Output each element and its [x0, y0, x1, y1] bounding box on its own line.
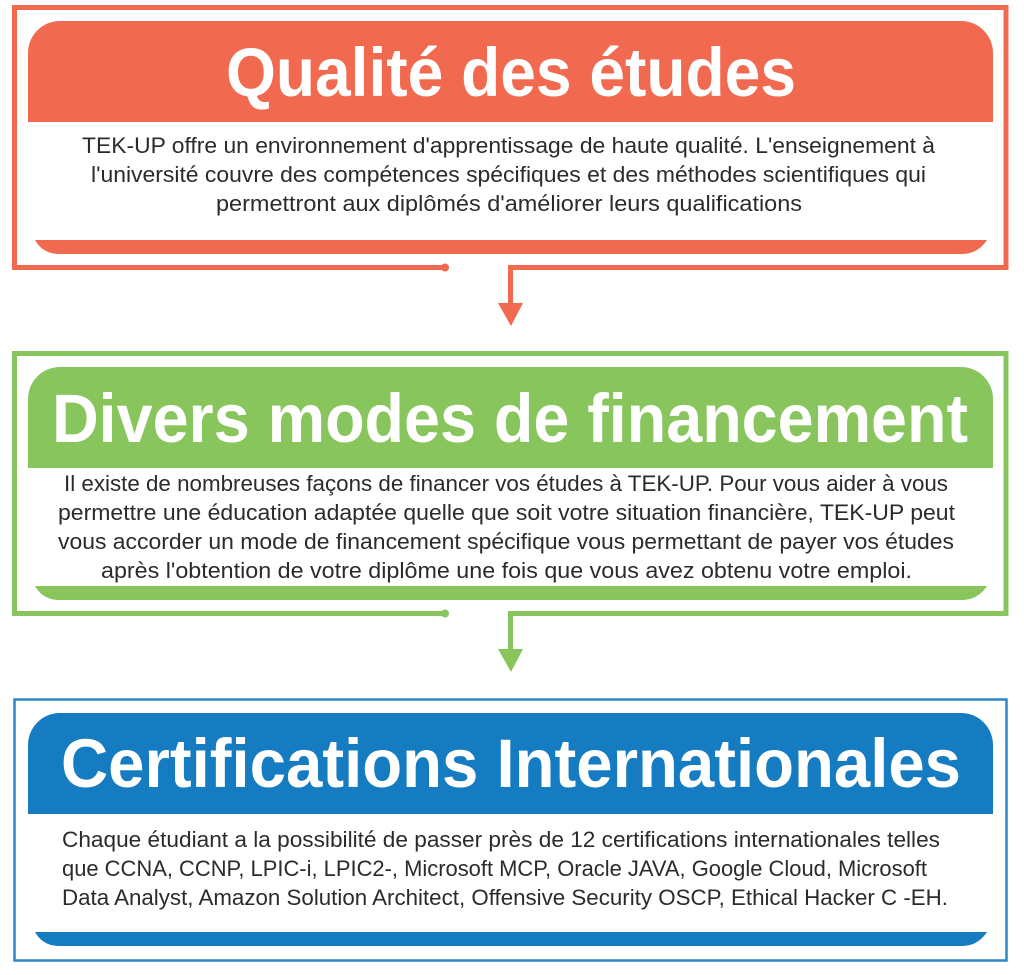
panel border: blue — [14, 700, 1006, 960]
panel: Qualité des études — [14, 8, 1006, 326]
header band: blue — [28, 713, 993, 814]
arrow head: green — [498, 649, 523, 672]
body text: qualité: permettront aux diplômés d'améliorer leurs qualifications — [216, 191, 802, 216]
footer band: red — [35, 240, 987, 254]
panel: Certifications Internationales — [14, 700, 1006, 960]
footer band: green — [35, 586, 987, 600]
panel border with arrow: green — [14, 354, 1006, 652]
footer band: blue — [35, 932, 987, 946]
arrow head: red — [498, 303, 523, 326]
header band: red — [28, 21, 993, 122]
panel border with arrow: red — [14, 8, 1006, 306]
body text: qualité — [82, 133, 936, 216]
heading: Qualité des études: Qualité des études — [226, 34, 796, 111]
body text: financement: vous accorder un mode de financement spécifique vous permettant de payer vos études — [58, 529, 954, 554]
body text: qualité: TEK-UP offre un environnement d'apprentissage de haute qualité. L'enseignement à — [82, 133, 936, 158]
header band: green — [28, 367, 993, 468]
body text: financement: Il existe de nombreuses façons de financer vos études à TEK-UP. Pour vous aider à vous — [64, 471, 948, 496]
body text: certifications: que CCNA, CCNP, LPIC-i, LPIC2-, Microsoft MCP, Oracle JAVA, Google Cloud, Microsoft — [62, 856, 927, 881]
body text: certifications — [62, 827, 948, 910]
connector dot: green — [441, 610, 449, 618]
heading: Certifications Internationales: Certifications Internationales — [61, 725, 961, 802]
body text: certifications: Data Analyst, Amazon Solution Architect, Offensive Security OSCP, Ethical Hacker C -EH. — [62, 885, 948, 910]
panel: Divers modes de financement — [14, 354, 1006, 672]
heading: Divers modes de financement: Divers modes de financement — [52, 380, 968, 457]
body text: financement: permettre une éducation adaptée quelle que soit votre situation financière, TEK-UP peut — [58, 500, 955, 525]
connector dot: red — [441, 264, 449, 272]
body text: qualité: l'université couvre des compétences spécifiques et des méthodes scientifiques qui — [91, 162, 926, 187]
body text: financement: après l'obtention de votre diplôme une fois que vous avez obtenu votre emploi. — [101, 558, 912, 583]
body text: certifications: Chaque étudiant a la possibilité de passer près de 12 certifications internationales telles — [62, 827, 940, 852]
body text: financement — [58, 471, 955, 583]
